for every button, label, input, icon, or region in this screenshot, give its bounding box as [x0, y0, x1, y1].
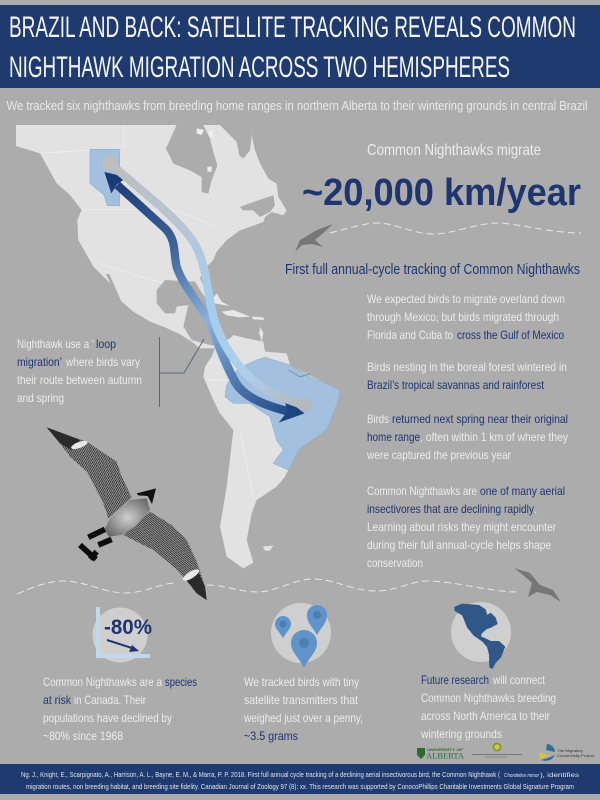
paragraph: decline: insectivores that are declining rapidly	[367, 502, 534, 516]
text: species at risk: Common Nighthawks are a	[43, 675, 162, 689]
Arctic islands	[197, 128, 213, 172]
Brazil	[225, 357, 340, 470]
text: future research: wintering grounds	[420, 727, 502, 741]
Gulf of St Lawrence	[240, 195, 275, 217]
footer citation	[0, 764, 600, 794]
paragraph: route: cross the Gulf of Mexico	[457, 328, 564, 342]
icon: -80% decline chart	[92, 607, 152, 662]
paragraph: route	[367, 292, 565, 342]
wing tips	[47, 427, 207, 600]
text: species at risk: ~80% since 1968	[43, 729, 123, 743]
Ungava Bay and Labrador Sea	[220, 125, 253, 159]
logo: University of Alberta: UNIVERSITY OF	[427, 748, 464, 752]
wing: left	[47, 427, 132, 518]
paragraph: route: through Mexico, but birds migrated through	[367, 310, 559, 324]
loop migration text: Nighthawk use a ‘	[17, 337, 94, 351]
footer citation: ), identifies	[540, 772, 579, 779]
text: future research: across North America to their	[421, 709, 550, 723]
paragraph: decline: .	[534, 502, 537, 516]
text: future research: Common Nighthawks breeding	[421, 691, 556, 705]
Amazon delta	[288, 370, 310, 377]
text: satellite transmitters: satellite transmitters that	[244, 693, 359, 707]
loop migration text: where birds vary	[65, 355, 140, 369]
paragraph: decline: conservation	[367, 556, 423, 570]
paragraph: decline	[367, 484, 565, 570]
body	[105, 498, 150, 537]
logo: University of Alberta: ALBERTA	[426, 752, 464, 760]
text: satellite transmitters	[243, 675, 363, 743]
paragraph: habitat: Birds nesting in the boreal forest wintered in	[367, 360, 567, 374]
paragraph: fidelity: were captured the previous year	[366, 448, 511, 462]
loop migration text: migration’	[17, 355, 62, 369]
icon: location pins	[271, 603, 331, 668]
text: future research	[420, 673, 556, 741]
icon: small bird bottom	[514, 568, 561, 602]
logo: Migratory Connectivity Project	[539, 744, 595, 761]
text: species at risk: populations have declined by	[43, 711, 172, 725]
icon: globe	[451, 602, 511, 669]
paragraph: habitat: Brazil’s tropical savannas and rainforest	[367, 378, 545, 392]
paragraph: fidelity: returned next spring near their original	[392, 412, 568, 426]
Arrow: pale autumn route	[102, 156, 312, 412]
headline: distance: ~20,000 km/year	[302, 172, 581, 214]
text: satellite transmitters: ~3.5 grams	[244, 729, 298, 743]
paragraph: decline: Common Nighthawks are	[367, 484, 477, 498]
text: future research: Future research	[421, 673, 489, 687]
logo: centre	[472, 742, 522, 758]
beak chevron	[137, 488, 156, 504]
Gulf of California	[106, 274, 121, 301]
footer citation: Chordeiles minor	[504, 773, 540, 779]
loop migration text: loop	[96, 337, 116, 351]
paragraph: decline: one of many aerial	[480, 484, 565, 498]
paragraph: route: Florida and Cuba to	[367, 328, 453, 342]
text: species at risk: species	[165, 675, 197, 689]
loop migration text	[17, 337, 142, 405]
paragraph: fidelity: , often within 1 km of where they	[420, 430, 568, 444]
map of the Americas with migration routes	[16, 125, 340, 568]
tail	[80, 529, 112, 559]
Arrow: southbound route	[210, 317, 305, 423]
loop migration text: and spring	[17, 391, 64, 405]
paragraph: fidelity	[366, 412, 568, 462]
text: future research: will connect	[492, 673, 546, 687]
wing: right	[123, 512, 207, 600]
Hudson Bay	[166, 125, 217, 194]
nighthawk illustration	[47, 427, 207, 600]
wave divider top	[330, 223, 581, 234]
logo: Migratory Connectivity Project: The Migratory	[557, 748, 583, 753]
footer citation: Ng. J., Knight, E., Scarpignato, A., Harrison, A. L., Bayne, E. M., & Marra, P. P. 2018. First full annual cycle tracking of a declining aerial insectivorous bird, the Common Nighthawk (	[21, 770, 500, 779]
logo: Migratory Connectivity Project: Connectivity Project	[557, 753, 595, 758]
paragraph: fidelity: home range	[367, 430, 420, 444]
text: satellite transmitters: We tracked birds with tiny	[244, 675, 359, 689]
paragraph: decline: during their full annual-cycle helps shape	[367, 538, 551, 552]
wing bars	[70, 439, 89, 451]
paragraph: decline: Learning about risks they might encounter	[367, 520, 556, 534]
Falkland Islands	[263, 545, 273, 551]
headline: migrate: Common Nighthawks migrate	[367, 142, 541, 159]
text: satellite transmitters: weighed just over a penny,	[243, 711, 363, 725]
text: species at risk: at risk	[43, 693, 72, 707]
Caribbean islands	[212, 293, 264, 342]
paragraph: route: We expected birds to migrate overland down	[367, 292, 565, 306]
paragraph: habitat	[367, 360, 567, 392]
icon: small bird top	[295, 224, 333, 252]
icon: -80% decline chart: -80%	[104, 616, 152, 639]
Alberta	[90, 149, 120, 206]
loop migration text: their route between autumn	[17, 373, 142, 387]
title banner	[0, 5, 600, 88]
Borders	[40, 127, 253, 497]
paragraph: fidelity: Birds	[367, 412, 389, 426]
text: species at risk: in Canada. Their	[74, 693, 146, 707]
text: species at risk	[43, 675, 197, 743]
logo: University of Alberta	[417, 748, 464, 760]
Arrow: northbound route	[104, 172, 213, 327]
wave divider bottom	[17, 579, 517, 594]
callout leader line	[160, 337, 204, 407]
land: North and South America	[16, 125, 338, 568]
